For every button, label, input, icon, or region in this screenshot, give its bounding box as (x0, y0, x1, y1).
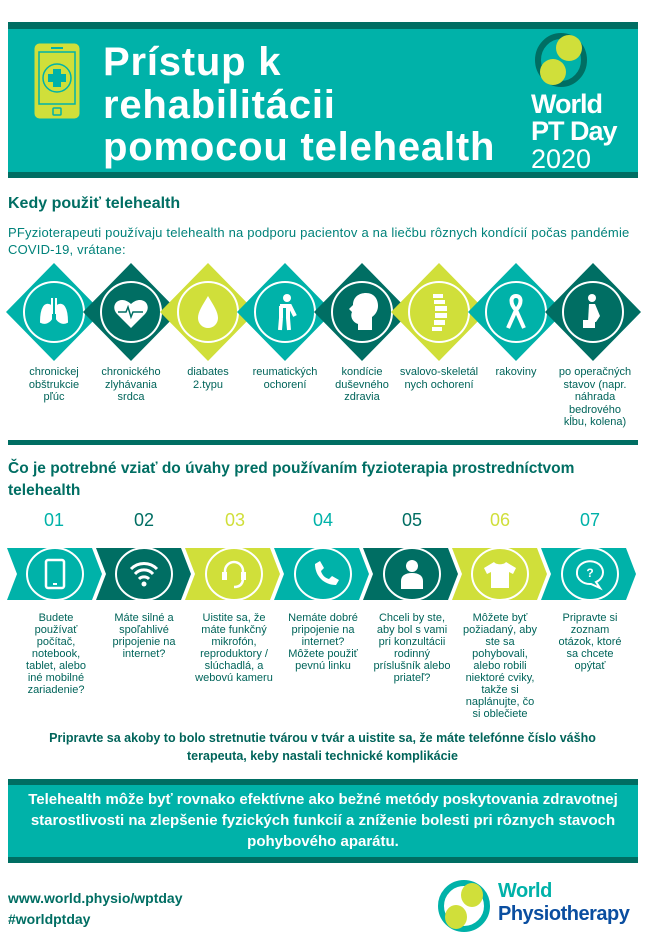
footer links: www.world.physio/wptday (8, 890, 182, 906)
diamond: spine (391, 263, 487, 361)
step descriptions: Nemáte dobré pripojenie na internet? Môžete použiť pevnú linku (288, 612, 358, 672)
chevron 07 question (541, 548, 636, 600)
heading: Kedy použiť telehealth: Kedy použiť telehealth (8, 195, 180, 212)
labels conditions (29, 366, 631, 428)
chevron 07 question: ? (586, 566, 594, 580)
title: Prístup k (103, 40, 281, 84)
header band (8, 22, 638, 178)
step descriptions (26, 612, 621, 720)
step descriptions: Budete používať počítač, notebook, tablet, alebo iné mobilné zariadenie? (26, 612, 86, 696)
chevron 04 phone (274, 548, 369, 600)
logo: World Physiotherapy (438, 880, 630, 932)
icon: phone with cross (34, 44, 80, 118)
step numbers: 05 (402, 510, 422, 530)
diamond: person (237, 263, 333, 361)
labels conditions: po operačných stavov (napr. náhrada bedrového kĺbu, kolena) (559, 366, 631, 428)
step descriptions: Uistite sa, že máte funkčný mikrofón, reproduktory / slúchadlá, a webovú kameru (195, 612, 273, 684)
note text: Pripravte sa akoby to bolo stretnutie tvárou v tvár a uistite sa, že máte telefónne číslo vášho terapeuta, keby nastali technické komplikácie (49, 731, 596, 763)
step numbers: 06 (490, 510, 510, 530)
step numbers: 02 (134, 510, 154, 530)
labels conditions: kondície duševného zdravia (335, 366, 389, 403)
logo: World PT Day 2020 (531, 33, 618, 174)
diamond: sitting person (545, 263, 641, 361)
heading section 2: Čo je potrebné vziať do úvahy pred používaním fyzioterapia prostredníctvom telehealth (8, 460, 574, 499)
diamond: ribbon (468, 263, 564, 361)
chevron row (7, 548, 636, 600)
diamond: drop (160, 263, 256, 361)
step numbers: 04 (313, 510, 333, 530)
step numbers (44, 510, 600, 530)
labels conditions: diabates 2.typu (187, 366, 229, 390)
step numbers: 01 (44, 510, 64, 530)
title: rehabilitácii (103, 82, 336, 126)
chevron 02 wifi (96, 548, 191, 600)
step descriptions: Pripravte si zoznam otázok, ktoré sa chcete opýtať (558, 612, 621, 672)
step descriptions: Máte silné a spoľahlivé pripojenie na internet? (112, 612, 176, 660)
step numbers: 03 (225, 510, 245, 530)
chevron 05 person (363, 548, 458, 600)
chevron 06 shirt (452, 548, 547, 600)
labels conditions: reumatických ochorení (253, 366, 317, 390)
intro text: PFyzioterapeuti používaju telehealth na podporu pacientov a na liečbu rôznych kondícií počas pandémie COVID-19, vrátane: (8, 225, 629, 257)
chevron 03 headset (185, 548, 280, 600)
labels conditions: chronického zlyhávania srdca (101, 366, 161, 403)
bottom callout band (8, 779, 638, 863)
step descriptions: Chceli by ste, aby bol s vami pri konzultácii rodinný príslušník alebo priateľ? (373, 612, 451, 684)
logo: World Physiotherapy: Physiotherapy (498, 903, 629, 925)
labels conditions: rakoviny (496, 366, 536, 378)
diamond: heart (83, 263, 179, 361)
chevron 01 tablet (7, 548, 102, 600)
logo: World PT Day 2020: PT Day (531, 116, 617, 146)
title (103, 40, 495, 169)
step numbers: 07 (580, 510, 600, 530)
footer links (8, 890, 182, 927)
logo: World Physiotherapy: World (498, 880, 552, 902)
labels conditions: svalovo-skeletál nych ochorení (400, 366, 478, 390)
logo: World PT Day 2020: World (531, 89, 602, 119)
logo: World PT Day 2020: 2020 (531, 144, 591, 174)
labels conditions: chronickej obštrukcie pľúc (29, 366, 79, 403)
diamonds row (6, 263, 641, 361)
step descriptions: Môžete byť požiadaný, aby ste sa pohybovali, alebo robili niektoré cviky, takže si naplánujte, čo si oblečiete (463, 612, 537, 720)
diamond: head (314, 263, 410, 361)
footer links: #worldptday (8, 911, 90, 927)
diamond: lungs (6, 263, 102, 361)
bottom callout band: Telehealth môže byť rovnako efektívne ako bežné metódy poskytovania zdravotnej starostlivosti na zlepšenie fyzických funkcií a zníženie bolesti pri rôznych stavoch pohybového aparátu. (28, 791, 618, 850)
title: pomocou telehealth (103, 125, 495, 169)
